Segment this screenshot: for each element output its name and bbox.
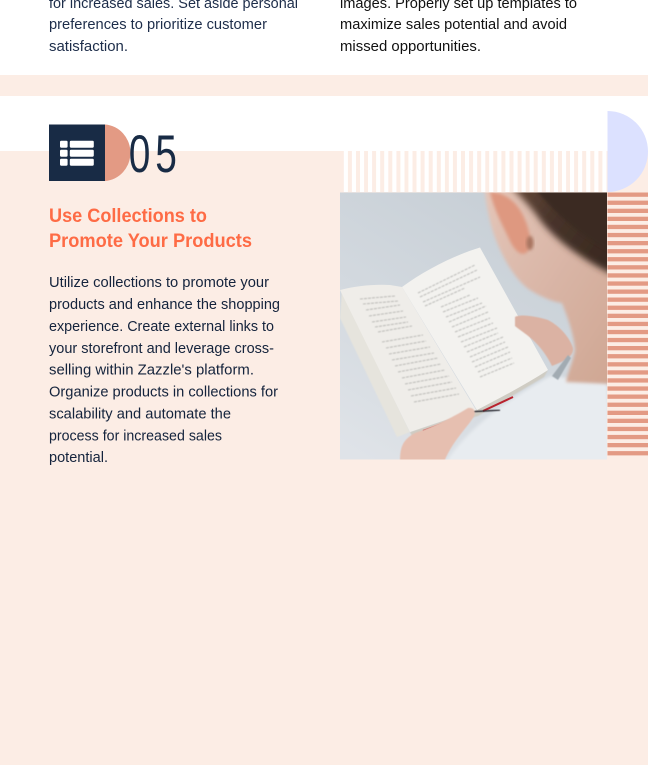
hair: [510, 192, 607, 278]
dark hair core: [537, 192, 596, 228]
text block: previous section right column: maximize sales potential and avoid: [340, 17, 567, 33]
body text: your storefront and leverage cross-: [49, 341, 274, 357]
text block: previous section left column: preferences to prioritize customer: [49, 17, 267, 33]
text block: previous section left column: satisfaction.: [49, 39, 128, 55]
infographic canvas: [0, 0, 648, 465]
text block: previous section right column: [340, 0, 577, 55]
heading: [49, 205, 252, 252]
body text: scalability and automate the: [49, 406, 231, 422]
heading: Promote Your Products: [49, 230, 252, 252]
watch strap: [552, 355, 571, 380]
body text: [49, 275, 280, 466]
section number 05: 05: [129, 124, 182, 183]
left hand: [400, 408, 475, 462]
body text: experience. Create external links to: [49, 319, 274, 335]
red ribbon: [423, 397, 513, 431]
body text: process for increased sales: [49, 428, 222, 444]
horizontal stripe pattern right of photo: [608, 192, 648, 455]
ear: [490, 192, 531, 254]
right hand: [515, 316, 573, 366]
lavender semicircle: [608, 111, 648, 192]
shirt: [446, 376, 612, 462]
vertical stripe pattern above photo: [344, 151, 606, 192]
printed lines left page: [360, 296, 459, 402]
icon: list: [60, 141, 94, 166]
text block: previous section left column: [49, 0, 298, 55]
heading: Use Collections to: [49, 205, 207, 227]
body text: products and enhance the shopping: [49, 297, 280, 313]
right page: [402, 248, 548, 410]
page edges under right page: [410, 370, 548, 436]
body text: selling within Zazzle's platform.: [49, 362, 254, 378]
book page block: [340, 290, 410, 437]
section number badge: [49, 124, 182, 183]
printed lines right page: [418, 265, 514, 377]
ear shadow: [526, 236, 534, 250]
salmon half circle: [105, 124, 130, 181]
body text: Organize products in collections for: [49, 384, 278, 400]
text block: previous section right column: missed opportunities.: [340, 39, 481, 55]
left page: [340, 285, 476, 432]
photo: person reading a book: [340, 180, 620, 462]
body text: potential.: [49, 450, 108, 466]
navy icon square: [49, 124, 105, 181]
body text: Utilize collections to promote your: [49, 275, 269, 291]
neck and head: [484, 185, 615, 384]
